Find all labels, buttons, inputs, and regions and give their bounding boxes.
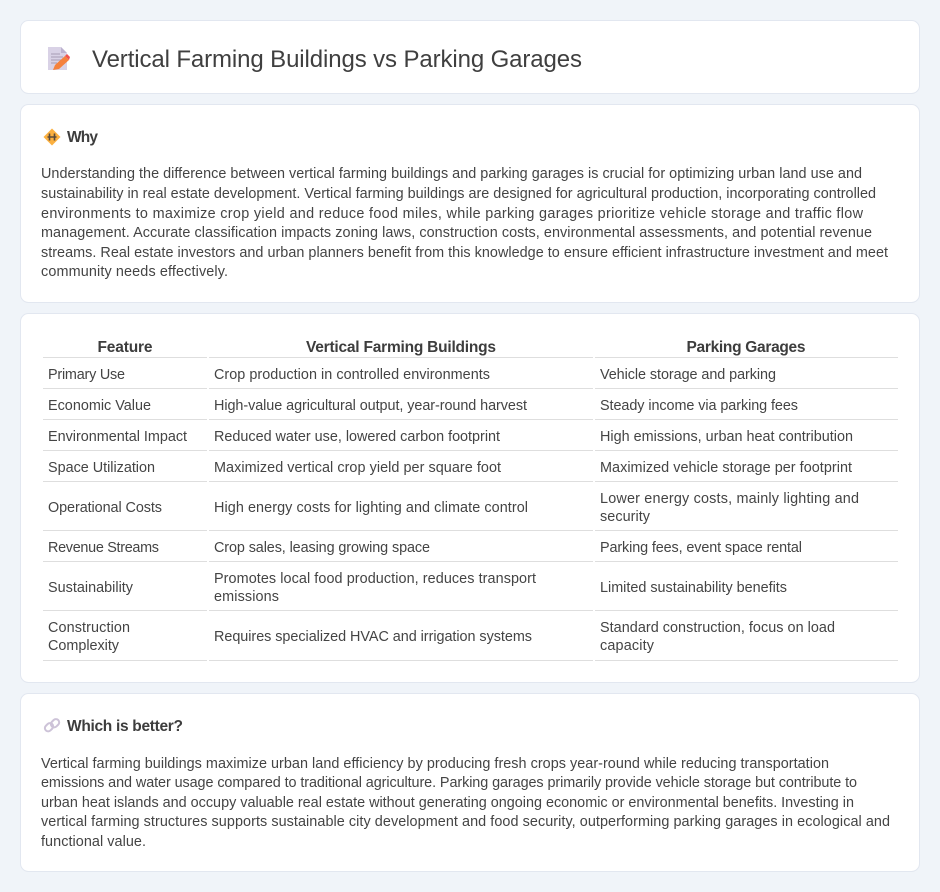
row: economic value [48,398,798,414]
text block: verdict paragraph: functional value. [41,834,146,850]
row: economic value: High-value agricultural output, year-round harvest [214,398,527,414]
title text: Vertical Farming Buildings vs Parking Garages [92,46,582,73]
row: revenue streams: Parking fees, event space rental [600,540,802,556]
row: construction complexity: Complexity [48,638,120,654]
row: space utilization: Maximized vehicle storage per footprint [600,460,852,476]
icon: road sign diamond [44,128,60,146]
text block: verdict paragraph: vertical farming structures supports sustainable city development and food security, outperforming parking garages in ecological and [41,814,890,830]
icon: document with pencil [48,47,70,70]
table header [98,339,806,356]
text block: why paragraph: environments to maximize crop yield and reduce food miles, while parking garages prioritize vehicle storage and traffic flow [41,206,864,222]
row: environmental impact [48,429,853,445]
heading: why: Why [67,129,98,146]
row: operational costs: Operational Costs [48,500,162,516]
row: revenue streams [48,540,802,556]
text block: why paragraph: streams. Real estate investors and urban planners benefit from this knowledge to ensure efficient infrastructure investment and meet [41,245,888,261]
row: construction complexity: capacity [600,638,655,654]
row: sustainability: Sustainability [48,580,134,596]
text block: verdict paragraph: urban heat islands and occupy valuable real estate without generating ongoing economic or environmental benefits. Investing in [41,795,854,811]
row: primary use: Vehicle storage and parking [600,367,776,383]
row: primary use: Crop production in controlled environments [214,367,490,383]
panel: why [20,104,920,302]
row: operational costs [48,491,859,525]
panel: comparison table [20,314,920,682]
icon: link [44,718,61,733]
panel: title [20,20,920,94]
row: revenue streams: Crop sales, leasing growing space [214,540,430,556]
table header: Vertical Farming Buildings [306,339,496,356]
row: construction complexity: Standard construction, focus on load [600,620,835,636]
row: operational costs: security [600,509,651,525]
table header: Feature [98,339,153,356]
table header: Parking Garages [686,339,806,356]
row: construction complexity: Construction [48,620,130,636]
row: sustainability: Promotes local food production, reduces transport [214,571,536,587]
row: sustainability: emissions [214,589,279,605]
text block: why paragraph: Understanding the difference between vertical farming buildings and parking garages is crucial for optimizing urban land use and [41,166,862,182]
text block: why paragraph: management. Accurate classification impacts zoning laws, construction costs, environmental assessments, and potential revenue [41,225,872,241]
row: construction complexity [48,620,835,654]
row: construction complexity: Requires specialized HVAC and irrigation systems [214,629,532,645]
row: economic value: Steady income via parking fees [600,398,798,414]
row: space utilization [48,460,852,476]
text block: verdict paragraph [41,756,890,850]
row: operational costs: High energy costs for lighting and climate control [214,500,528,516]
row: environmental impact: Environmental Impact [48,429,187,445]
row: revenue streams: Revenue Streams [48,540,159,556]
row: primary use [48,367,776,383]
row: environmental impact: High emissions, urban heat contribution [600,429,853,445]
row: operational costs: Lower energy costs, mainly lighting and [600,491,859,507]
heading: which is better: Which is better? [67,718,183,735]
text block: verdict paragraph: Vertical farming buildings maximize urban land efficiency by producing fresh crops year-round while reducing transportation [41,756,829,772]
row: sustainability: Limited sustainability benefits [600,580,787,596]
row: economic value: Economic Value [48,398,151,414]
row: space utilization: Maximized vertical crop yield per square foot [214,460,501,476]
row: environmental impact: Reduced water use, lowered carbon footprint [214,429,500,445]
text block: why paragraph [41,166,888,280]
row: space utilization: Space Utilization [48,460,155,476]
row: sustainability [48,571,787,605]
panel: which is better [20,694,920,872]
text block: why paragraph: community needs effectively. [41,264,228,280]
row: primary use: Primary Use [48,367,125,383]
text block: verdict paragraph: emissions and water usage compared to traditional agriculture. Parking garages primarily provide vehicle storage but contribute to [41,775,857,791]
text block: why paragraph: sustainability in real estate development. Vertical farming buildings are designed for agricultural production, incorporating controlled [41,186,876,202]
